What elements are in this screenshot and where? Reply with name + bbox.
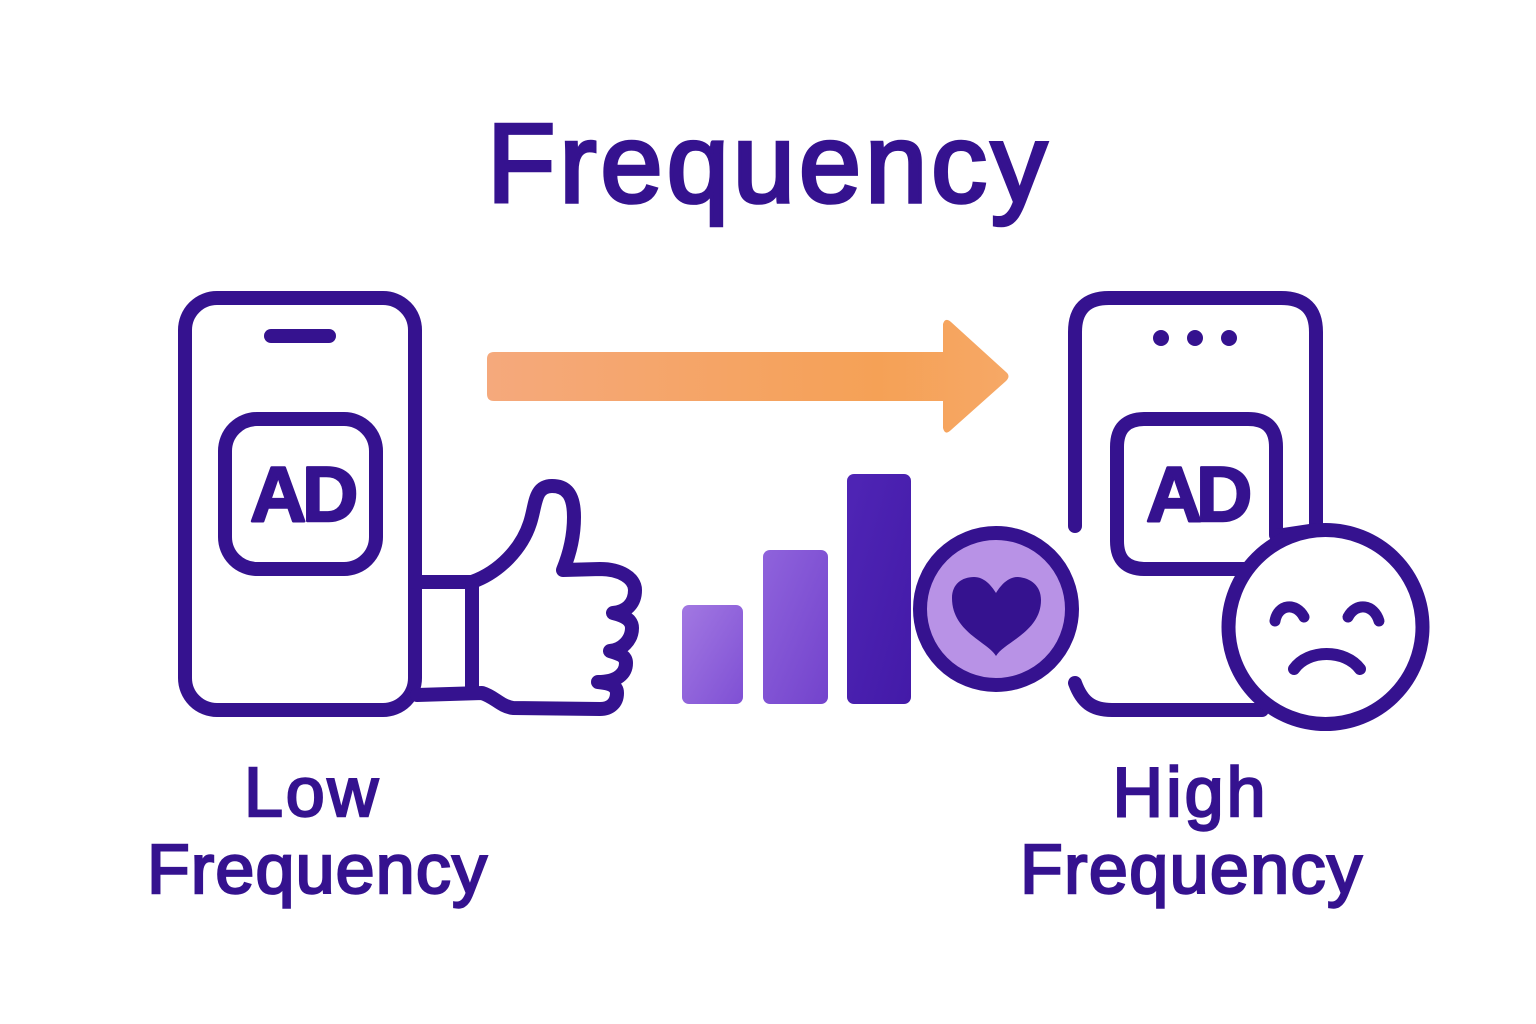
- title: Frequency: [487, 101, 1047, 226]
- icon: low frequency phone with ad: [185, 298, 415, 710]
- label: high frequency: Frequency: [1020, 830, 1362, 908]
- label: low frequency: [147, 753, 487, 908]
- label: AD left: A: [250, 450, 306, 538]
- label: low frequency: Low: [244, 753, 378, 831]
- label: high frequency: High: [1112, 753, 1266, 831]
- label: high frequency: [1020, 753, 1362, 908]
- icon: heart in circle: [920, 533, 1072, 685]
- arrow: frequency increase: [487, 320, 1008, 433]
- icon: thumbs up: [415, 486, 635, 709]
- icon: three dots: [1153, 330, 1237, 346]
- label: low frequency: Frequency: [147, 830, 487, 908]
- phone speaker: [271, 329, 329, 343]
- ad box left: [225, 419, 376, 569]
- label: AD right: A: [1146, 450, 1202, 538]
- label: AD right: D: [1196, 450, 1252, 538]
- icon: sad face: [1228, 523, 1422, 724]
- ad box right: [1117, 419, 1276, 569]
- bar chart: [682, 474, 911, 704]
- icon: high frequency phone with ad: [1075, 298, 1316, 710]
- label: AD left: D: [302, 450, 358, 538]
